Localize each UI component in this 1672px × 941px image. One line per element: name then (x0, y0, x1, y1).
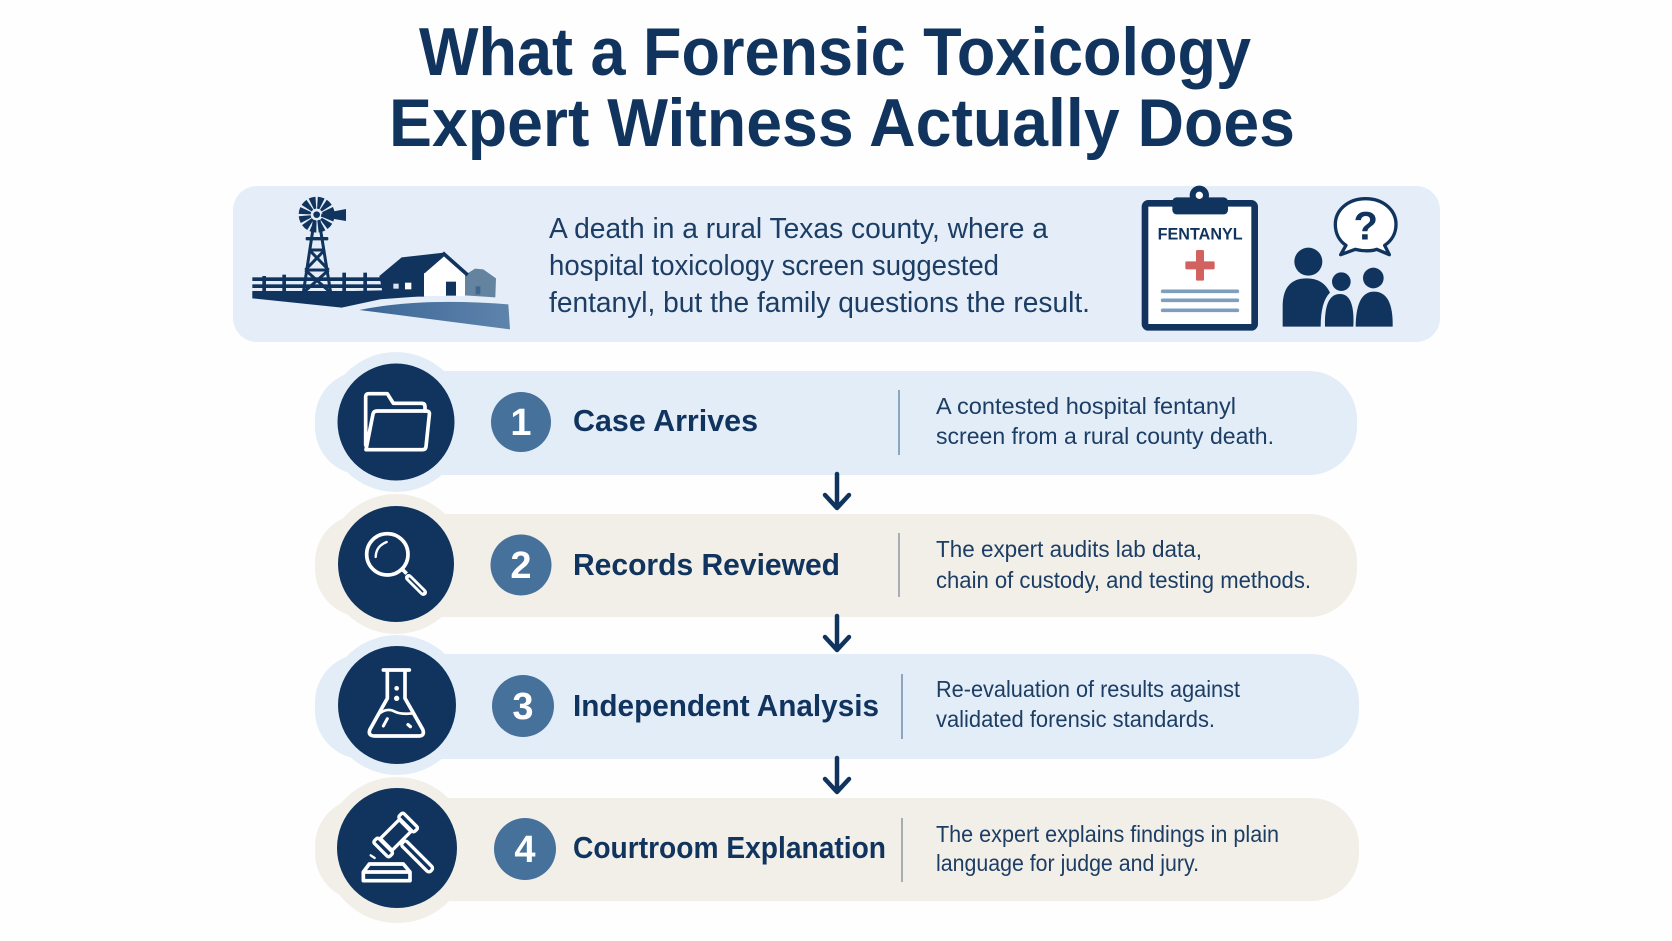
step heading: Case Arrives (573, 403, 758, 438)
number badge 4 (494, 818, 556, 880)
icon: gavel (337, 788, 457, 908)
step heading: Independent Analysis (573, 688, 879, 723)
number badge 3 (492, 675, 554, 737)
number badge 1 (491, 392, 551, 452)
step description (936, 676, 1240, 732)
step 2: records reviewed (315, 494, 1357, 634)
step description: chain of custody, and testing methods. (936, 567, 1311, 593)
step heading: Records Reviewed (573, 547, 840, 582)
case description text: fentanyl, but the family questions the result. (549, 287, 1090, 319)
case description text (549, 213, 1090, 319)
step heading: Courtroom Explanation (573, 830, 886, 865)
step description: The expert audits lab data, (936, 536, 1202, 562)
title: Expert Witness Actually Does (389, 85, 1295, 161)
title (389, 14, 1295, 161)
arrow 3 to 4 (825, 758, 849, 792)
icon: flask (338, 646, 456, 764)
case description text: hospital toxicology screen suggested (549, 250, 999, 282)
panel: case scenario (233, 186, 1440, 342)
number badge 1: 1 (510, 402, 532, 444)
step description (936, 393, 1274, 449)
step 3: independent analysis (315, 635, 1359, 775)
step description: A contested hospital fentanyl (936, 393, 1236, 419)
icon: fentanyl clipboard: FENTANYL (1158, 224, 1243, 243)
icon: fentanyl clipboard (1145, 186, 1255, 327)
step description: screen from a rural county death. (936, 423, 1274, 449)
number badge 2: 2 (510, 545, 532, 587)
step description (936, 821, 1279, 876)
icon: folder (338, 364, 454, 480)
number badge 2 (490, 534, 552, 596)
step 1: case arrives (315, 352, 1357, 492)
step description: Re-evaluation of results against (936, 676, 1240, 702)
case description text: A death in a rural Texas county, where a (549, 213, 1049, 245)
arrow 1 to 2 (825, 474, 849, 508)
step 4: courtroom explanation (315, 777, 1359, 923)
step description (936, 536, 1311, 593)
step description: validated forensic standards. (936, 706, 1215, 732)
number badge 4: 4 (514, 829, 536, 871)
title: What a Forensic Toxicology (419, 14, 1251, 90)
number badge 3: 3 (512, 686, 534, 728)
step description: The expert explains findings in plain (936, 821, 1279, 847)
step description: language for judge and jury. (936, 850, 1199, 876)
icon: magnifying glass (338, 506, 454, 622)
icon: family with question (1283, 199, 1396, 327)
icon: rural farm with windmill (252, 203, 510, 329)
arrow 2 to 3 (825, 616, 849, 650)
icon: family with question: ? (1353, 204, 1378, 248)
